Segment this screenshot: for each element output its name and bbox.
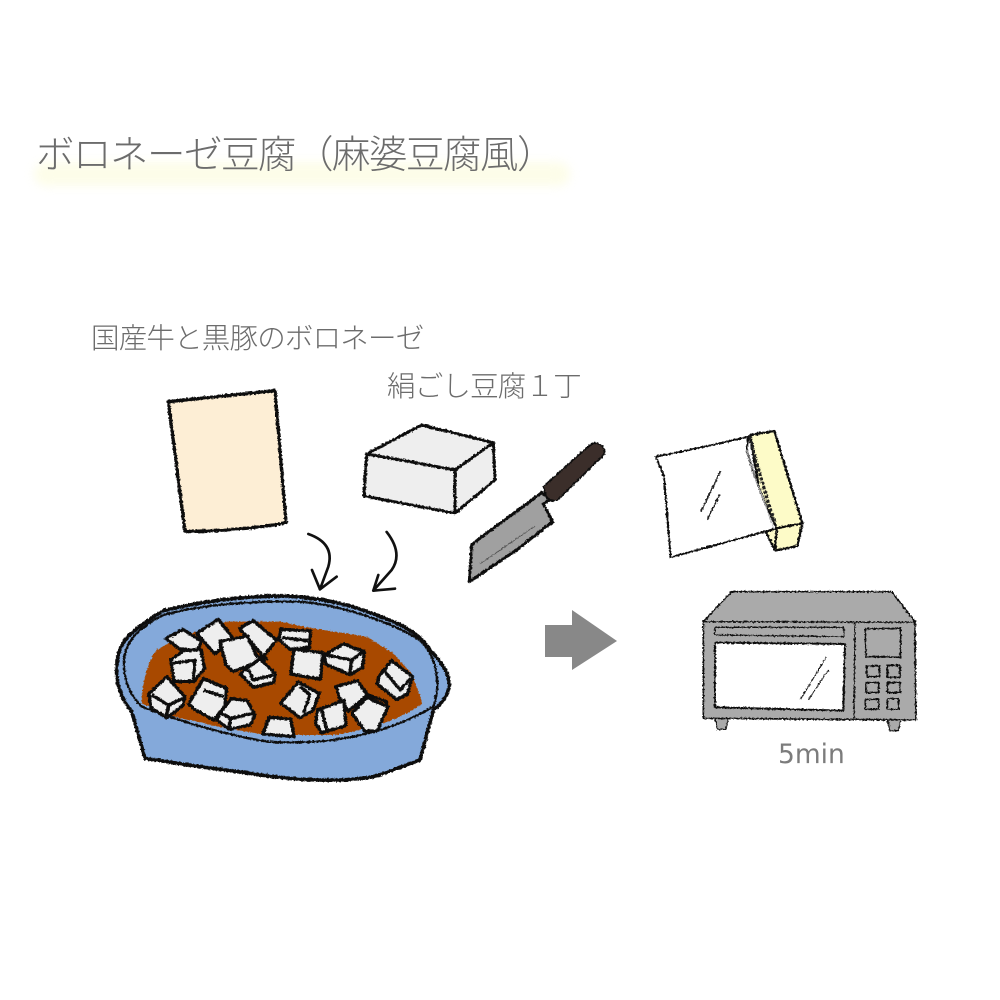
title highlight [34, 162, 570, 186]
dish body [116, 596, 449, 780]
tofu cubes [149, 619, 413, 737]
arrow: tofu to dish [373, 532, 396, 591]
icon: baking dish [116, 596, 449, 780]
ingredient label: silken tofu: 絹ごし豆腐１丁 [387, 364, 581, 405]
icon: microwave oven [703, 592, 916, 731]
icon: sauce packet [168, 391, 286, 532]
sauce [142, 622, 423, 735]
time label: 5min [778, 739, 845, 770]
icon: tofu block [364, 425, 495, 513]
arrow: packet to dish [308, 534, 337, 589]
icon: wrapped tofu [656, 431, 802, 557]
ingredient label: bolognese: 国産牛と黒豚のボロネーゼ [91, 316, 423, 357]
title: ボロネーゼ豆腐（麻婆豆腐風） [36, 124, 554, 180]
icon: knife [469, 443, 604, 582]
arrow: dish to microwave [545, 610, 617, 670]
